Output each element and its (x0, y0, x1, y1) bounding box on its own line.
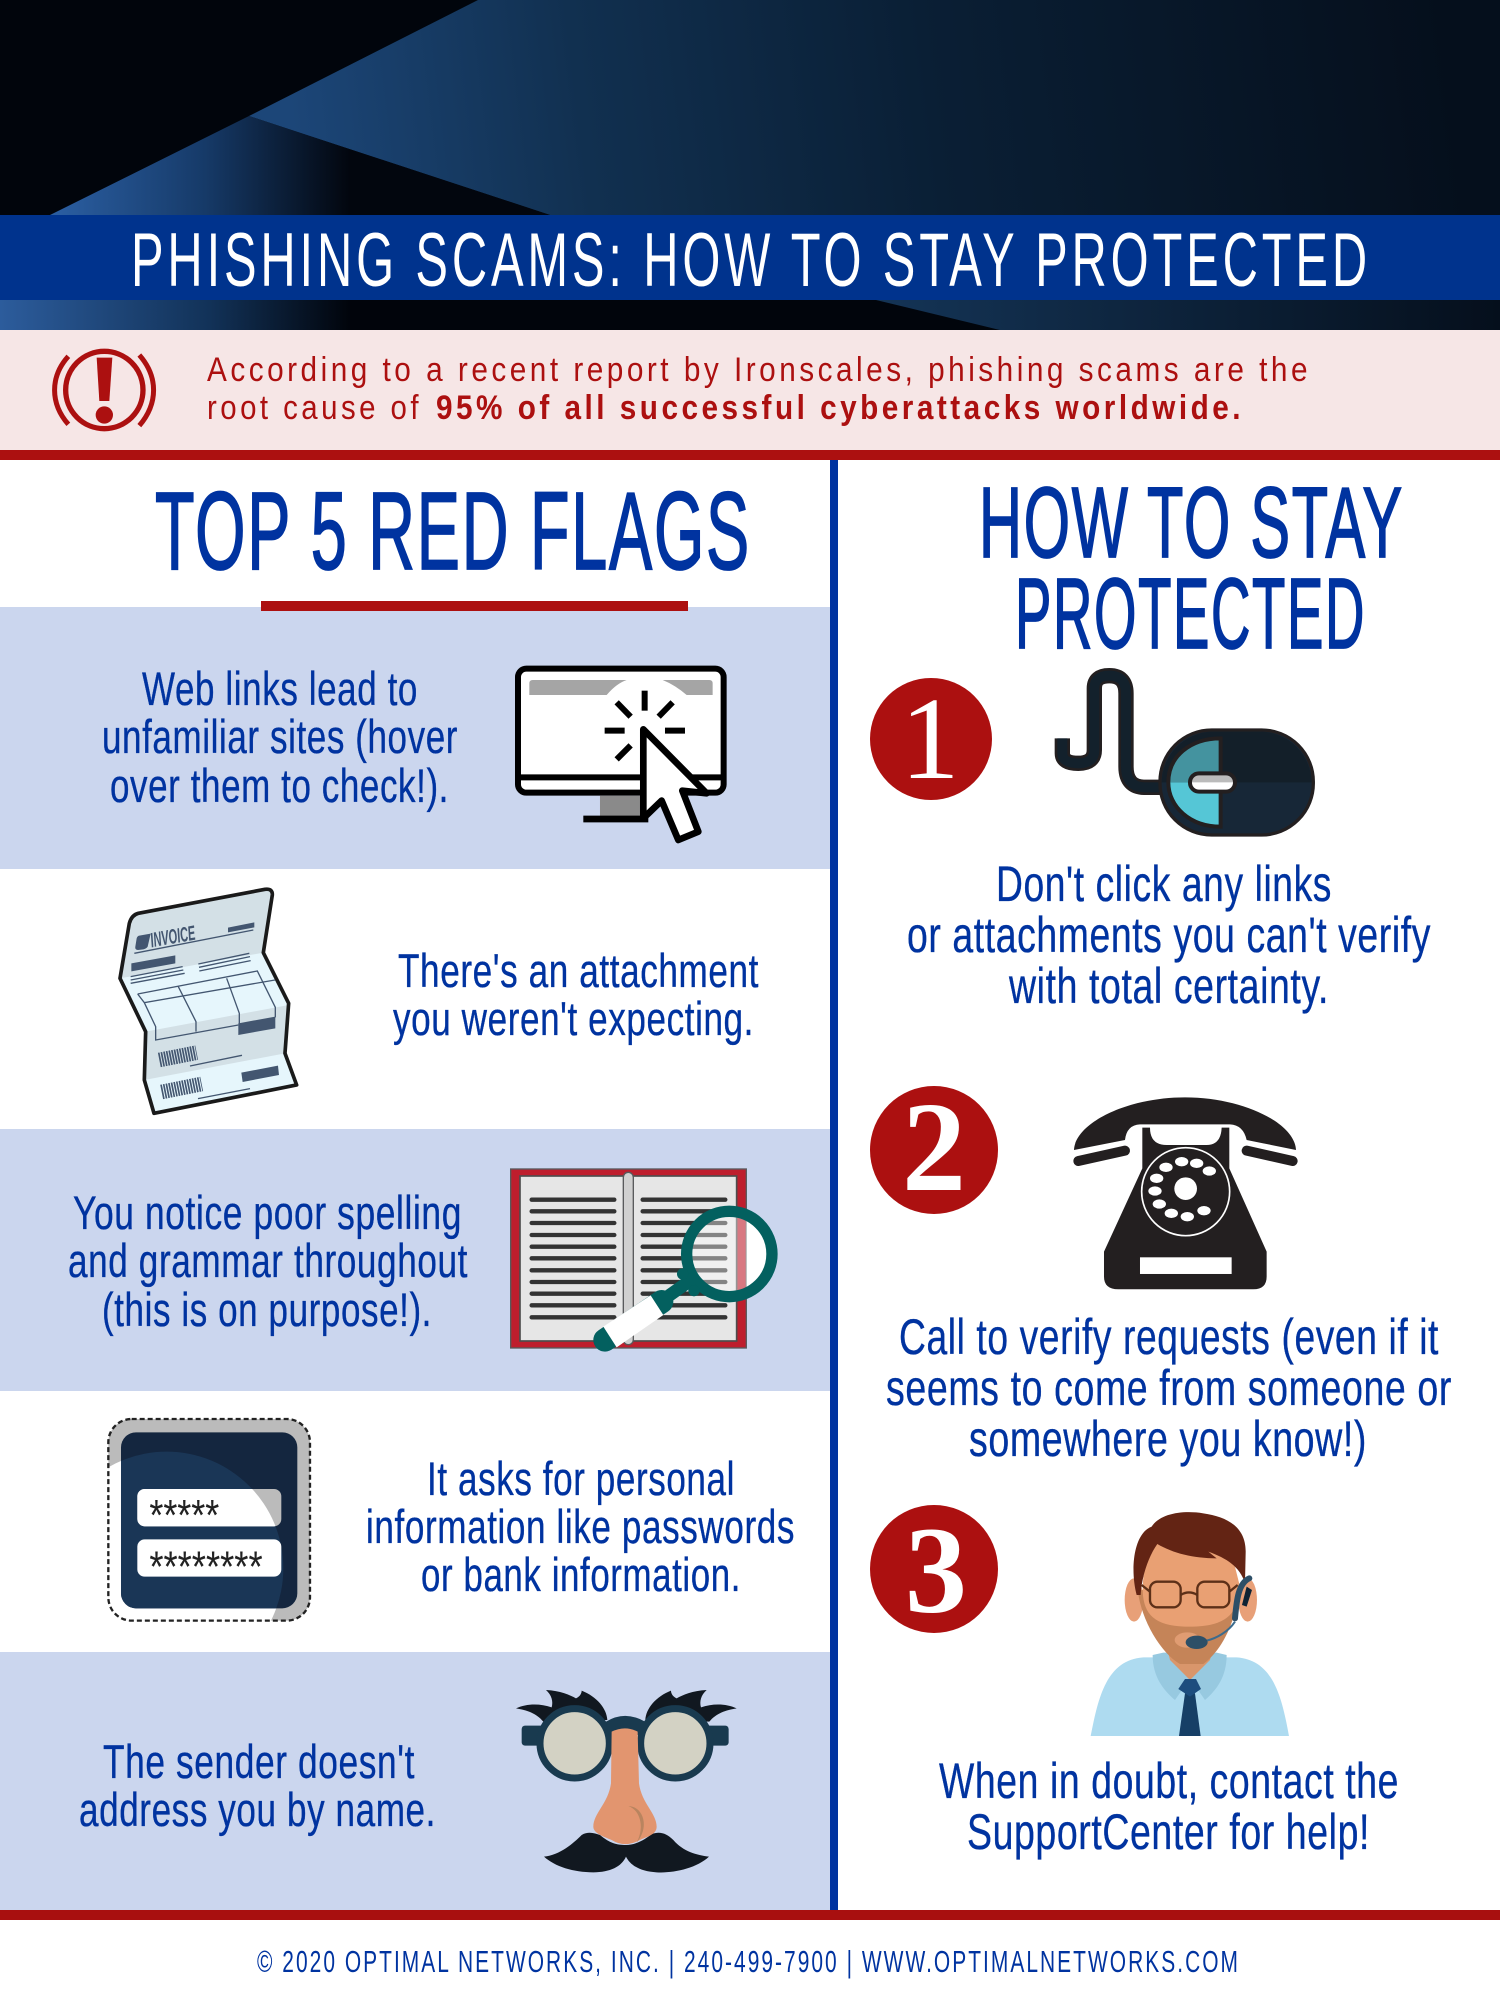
step 1 text: Don't click any links (996, 856, 1332, 912)
flag 2 text (393, 944, 759, 1045)
red divider top (0, 450, 1500, 460)
flag 3 text: and grammar throughout (68, 1234, 468, 1287)
red divider bottom (0, 1910, 1500, 1920)
step 3 text (939, 1753, 1399, 1860)
icon: password box (107, 1418, 312, 1622)
heading underline (261, 601, 688, 611)
flag 1 text (102, 662, 458, 812)
step 1 text: with total certainty. (1008, 958, 1329, 1014)
alert text: root cause of (207, 389, 422, 427)
row 3 background (0, 1129, 830, 1391)
heading: how to stay protected (979, 467, 1404, 670)
step 1 text (907, 856, 1431, 1014)
step 1 badge (870, 673, 992, 804)
icon: mouse (1062, 676, 1313, 835)
center divider (830, 460, 838, 1910)
alert text: According to a recent report by Ironscales, phishing scams are the (207, 351, 1311, 389)
alert text: 95% of all successful cyberattacks worldwide. (436, 389, 1244, 427)
step 1 badge: 1 (900, 673, 960, 804)
icon: monitor with cursor (518, 669, 724, 840)
panel: how to stay protected (870, 467, 1452, 1860)
heading: top 5 red flags: TOP 5 RED FLAGS (155, 470, 751, 593)
step 3 badge (870, 1502, 998, 1639)
icon: invoice: INVOICE (149, 922, 198, 952)
flag 4 text: or bank information. (421, 1548, 741, 1601)
flag 3 text (68, 1186, 468, 1336)
header background (0, 0, 1500, 330)
icon: telephone (1074, 1097, 1296, 1289)
step 2 text: somewhere you know!) (969, 1411, 1367, 1467)
flag 3 text: You notice poor spelling (73, 1186, 462, 1239)
alert panel (0, 330, 1500, 451)
icon: invoice (120, 889, 297, 1113)
icon: password box: ***** (149, 1492, 219, 1540)
flag 5 text: The sender doesn't (103, 1735, 415, 1788)
panel: red flags (0, 470, 830, 1910)
flag 1 text: over them to check!). (110, 759, 449, 812)
flag 5 text (79, 1735, 436, 1836)
icon: disguise glasses (516, 1690, 737, 1872)
step 2 text (886, 1309, 1452, 1467)
step 2 badge: 2 (902, 1076, 966, 1218)
step 3 badge: 3 (905, 1502, 967, 1639)
step 2 badge (870, 1076, 998, 1218)
icon: book and magnifier (511, 1169, 777, 1348)
row 5 background (0, 1652, 830, 1910)
icon: support agent (1091, 1512, 1289, 1736)
flag 4 text: It asks for personal (427, 1452, 735, 1505)
flag 2 text: you weren't expecting. (393, 992, 754, 1045)
flag 4 text (366, 1452, 795, 1601)
alert text (207, 351, 1311, 427)
flag 1 text: Web links lead to (142, 662, 418, 715)
icon: password box: ******** (149, 1544, 263, 1592)
flag 4 text: information like passwords (366, 1500, 795, 1553)
flag 2 text: There's an attachment (398, 944, 759, 997)
flag 5 text: address you by name. (79, 1783, 436, 1836)
step 3 text: SupportCenter for help! (967, 1804, 1370, 1860)
flag 1 text: unfamiliar sites (hover (102, 710, 458, 763)
flag 3 text: (this is on purpose!). (102, 1283, 432, 1336)
row 1 background (0, 607, 830, 869)
icon: alert (55, 351, 154, 429)
